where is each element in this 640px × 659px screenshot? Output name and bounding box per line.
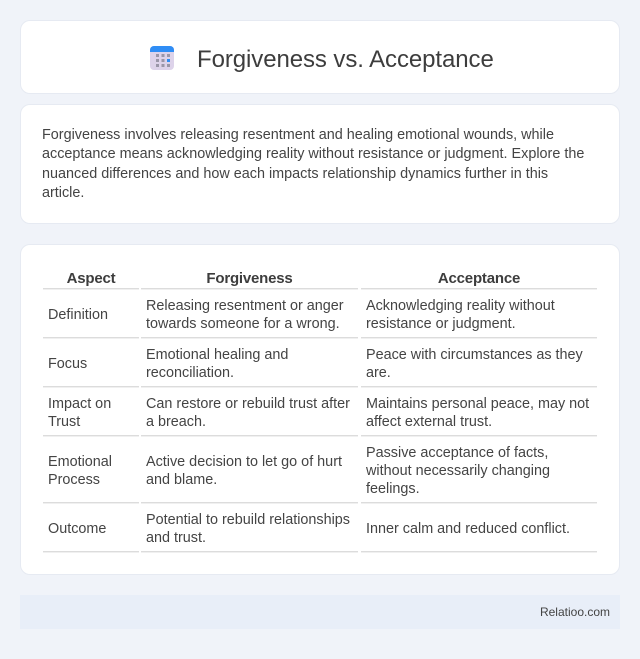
text: Emotional healing and — [146, 347, 288, 363]
text: and blame. — [146, 472, 217, 488]
intro text: nuanced differences and how each impacts relationship dynamics further in this — [42, 166, 548, 182]
text: Peace with circumstances as they — [366, 347, 583, 363]
text: Inner calm and reduced conflict. — [366, 521, 570, 537]
text: without necessarily changing — [366, 463, 550, 479]
text: a breach. — [146, 414, 206, 430]
icon: calendar — [150, 46, 174, 70]
text: feelings. — [366, 481, 420, 497]
row: definition: Definition — [48, 307, 108, 323]
text: Maintains personal peace, may not — [366, 396, 589, 412]
row: impact on trust: Impact on — [48, 396, 111, 412]
text: Passive acceptance of facts, — [366, 445, 548, 461]
text: Releasing resentment or anger — [146, 298, 344, 314]
intro text — [42, 127, 584, 201]
intro text: article. — [42, 185, 84, 201]
row: impact on trust: Trust — [48, 414, 80, 430]
header row — [67, 270, 520, 287]
row: emotional process — [48, 454, 112, 488]
footer bar — [20, 595, 620, 629]
text: are. — [366, 365, 391, 381]
table card — [20, 244, 620, 575]
text: affect external trust. — [366, 414, 492, 430]
text: towards someone for a wrong. — [146, 316, 340, 332]
text: reconciliation. — [146, 365, 234, 381]
row: emotional process: Process — [48, 472, 100, 488]
title card — [20, 20, 620, 94]
text: Acknowledging reality without — [366, 298, 555, 314]
text: Potential to rebuild relationships — [146, 512, 350, 528]
text: Active decision to let go of hurt — [146, 454, 342, 470]
header row: Forgiveness — [206, 270, 293, 287]
row: impact on trust — [48, 396, 111, 430]
intro text: acceptance means acknowledging reality without resistance or judgment. Explore the — [42, 146, 584, 162]
intro card — [20, 104, 620, 224]
row: focus: Focus — [48, 356, 87, 372]
footer text: Relatioo.com — [540, 605, 610, 619]
header row: Aspect — [67, 270, 115, 287]
header row: Acceptance — [438, 270, 520, 287]
intro text: Forgiveness involves releasing resentment and healing emotional wounds, while — [42, 127, 554, 143]
row: emotional process: Emotional — [48, 454, 112, 470]
text: and trust. — [146, 530, 206, 546]
text: resistance or judgment. — [366, 316, 516, 332]
row: outcome: Outcome — [48, 521, 106, 537]
text: Can restore or rebuild trust after — [146, 396, 350, 412]
title: Forgiveness vs. Acceptance — [197, 46, 494, 73]
